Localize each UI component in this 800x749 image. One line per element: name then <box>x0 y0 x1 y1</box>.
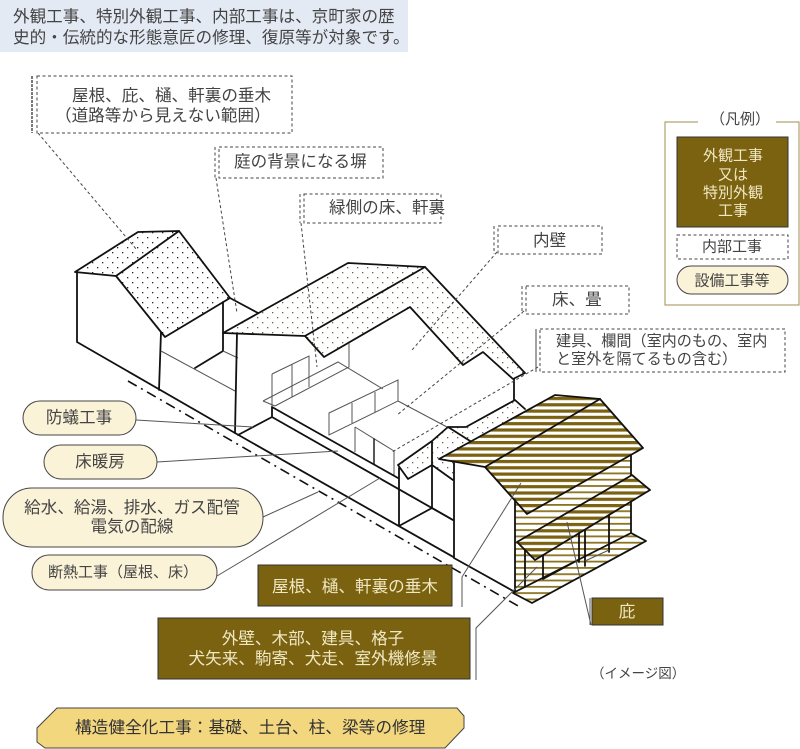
pill: insulation: 断熱工事（屋根、床） <box>48 564 198 581</box>
callout: floor, tatami <box>522 286 629 314</box>
pill: plumbing and wiring <box>3 488 263 547</box>
foundation lines <box>235 407 515 592</box>
pill: plumbing and wiring: 給水、給湯、排水、ガス配管 <box>24 498 240 517</box>
legend: equipment work <box>677 266 788 294</box>
callout: garden wall <box>215 147 383 178</box>
pill: insulation <box>32 555 217 590</box>
legend: exterior work: 工事 <box>718 202 748 220</box>
legend: equipment work: 設備工事等 <box>694 272 770 290</box>
pill: termite proofing: 防蟻工事 <box>46 408 112 427</box>
callout: veranda floor: 緑側の床、軒裏 <box>329 198 445 217</box>
pill: plumbing and wiring: 電気の配線 <box>91 517 174 536</box>
illustration: machiya cutaway <box>75 231 650 607</box>
callout: fittings, transoms: 建具、欄間（室内のもの、室内 <box>556 333 767 350</box>
main house roof <box>223 263 525 433</box>
dashed callout leaders <box>38 133 538 452</box>
callout: floor, tatami: 床、畳 <box>552 290 602 309</box>
small connecting wing <box>398 400 525 526</box>
image note: （イメージ図） <box>591 666 685 681</box>
heading note <box>0 0 410 52</box>
legend: exterior work: 外観工事 <box>703 148 763 164</box>
callout: roof, eaves: 屋根、庇、樋、軒裏の垂木 <box>72 86 272 105</box>
label: exterior walls, woodwork: 犬矢来、駒寄、犬走、室外機修景 <box>189 649 437 668</box>
front house <box>439 395 650 603</box>
callout: veranda floor <box>300 194 445 223</box>
label: exterior walls, woodwork: 外壁、木部、建具、格子 <box>222 629 404 648</box>
banner: structural work: 構造健全化工事：基礎、土台、柱、梁等の修理 <box>75 718 426 737</box>
legend: （凡例） <box>710 111 770 128</box>
callout: roof, eaves <box>32 76 292 133</box>
legend: interior work <box>677 235 788 259</box>
legend: interior work: 内部工事 <box>702 238 762 256</box>
heading note: 外観工事、特別外観工事、内部工事は、京町家の歴 <box>13 7 395 26</box>
legend: exterior work: 特別外観 <box>703 184 763 202</box>
pill: floor heating: 床暖房 <box>75 452 125 471</box>
label: exterior walls, woodwork <box>158 618 470 679</box>
legend: exterior work <box>677 137 788 227</box>
callout: garden wall: 庭の背景になる塀 <box>234 152 367 171</box>
solid callout leaders <box>136 420 591 680</box>
left house <box>75 231 258 433</box>
callout: fittings, transoms: と室外を隔てるもの含む） <box>556 351 737 368</box>
callout: inner wall: 内壁 <box>533 231 566 250</box>
legend <box>665 111 799 305</box>
heading note: 史的・伝統的な形態意匠の修理、復原等が対象です。 <box>13 28 410 47</box>
callout: roof, eaves: （道路等から見えない範囲） <box>55 106 271 125</box>
interior floor and screens <box>263 343 447 475</box>
label: canopy: 庇 <box>619 602 635 621</box>
road boundary line <box>128 381 520 607</box>
callout: fittings, transoms <box>536 329 785 372</box>
banner: structural work <box>37 708 464 748</box>
pill: floor heating <box>44 445 157 479</box>
legend: exterior work: 又は <box>718 166 748 184</box>
pill: termite proofing <box>23 401 136 435</box>
label: canopy <box>590 598 663 625</box>
callout: inner wall <box>494 226 602 254</box>
label: roof, gutter, rafters: 屋根、樋、軒裏の垂木 <box>272 577 438 596</box>
label: roof, gutter, rafters <box>258 565 452 606</box>
